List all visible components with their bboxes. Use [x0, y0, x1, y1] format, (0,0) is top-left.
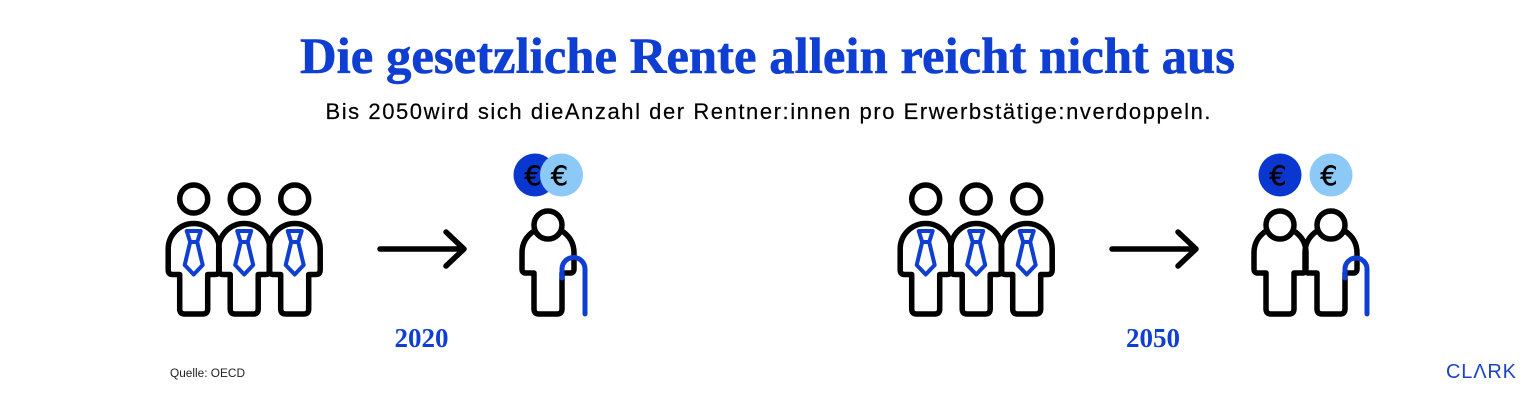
source note: Quelle: OECD — [170, 368, 245, 380]
icon: senior with cane — [522, 211, 585, 314]
icon: two seniors with cane — [1254, 211, 1367, 314]
icon: two euro coins: € — [1320, 161, 1338, 192]
icon: two overlapping euro coins: € — [551, 161, 568, 192]
icon: two overlapping euro coins — [514, 154, 583, 196]
panel: 2050 — [900, 154, 1367, 353]
icon: three workers — [168, 185, 320, 314]
logo: CLARK: CLΛRK — [1446, 361, 1517, 383]
icon: two euro coins: € — [1269, 161, 1287, 192]
arrow: 2020 — [380, 232, 464, 266]
icon: two euro coins — [1258, 154, 1352, 196]
year label: 2050: 2050 — [1126, 323, 1180, 353]
subtitle: Bis 2050wird sich dieAnzahl der Rentner:innen pro Erwerbstätige:nverdoppeln. — [326, 99, 1210, 124]
year label: 2020: 2020 — [394, 323, 448, 353]
icon: three workers 2050 — [900, 185, 1052, 314]
arrow: 2050 — [1112, 232, 1196, 266]
panel: 2020 — [168, 154, 585, 353]
icon: two overlapping euro coins: € — [524, 161, 542, 192]
title: Die gesetzliche Rente allein reicht nicht aus — [300, 29, 1235, 85]
